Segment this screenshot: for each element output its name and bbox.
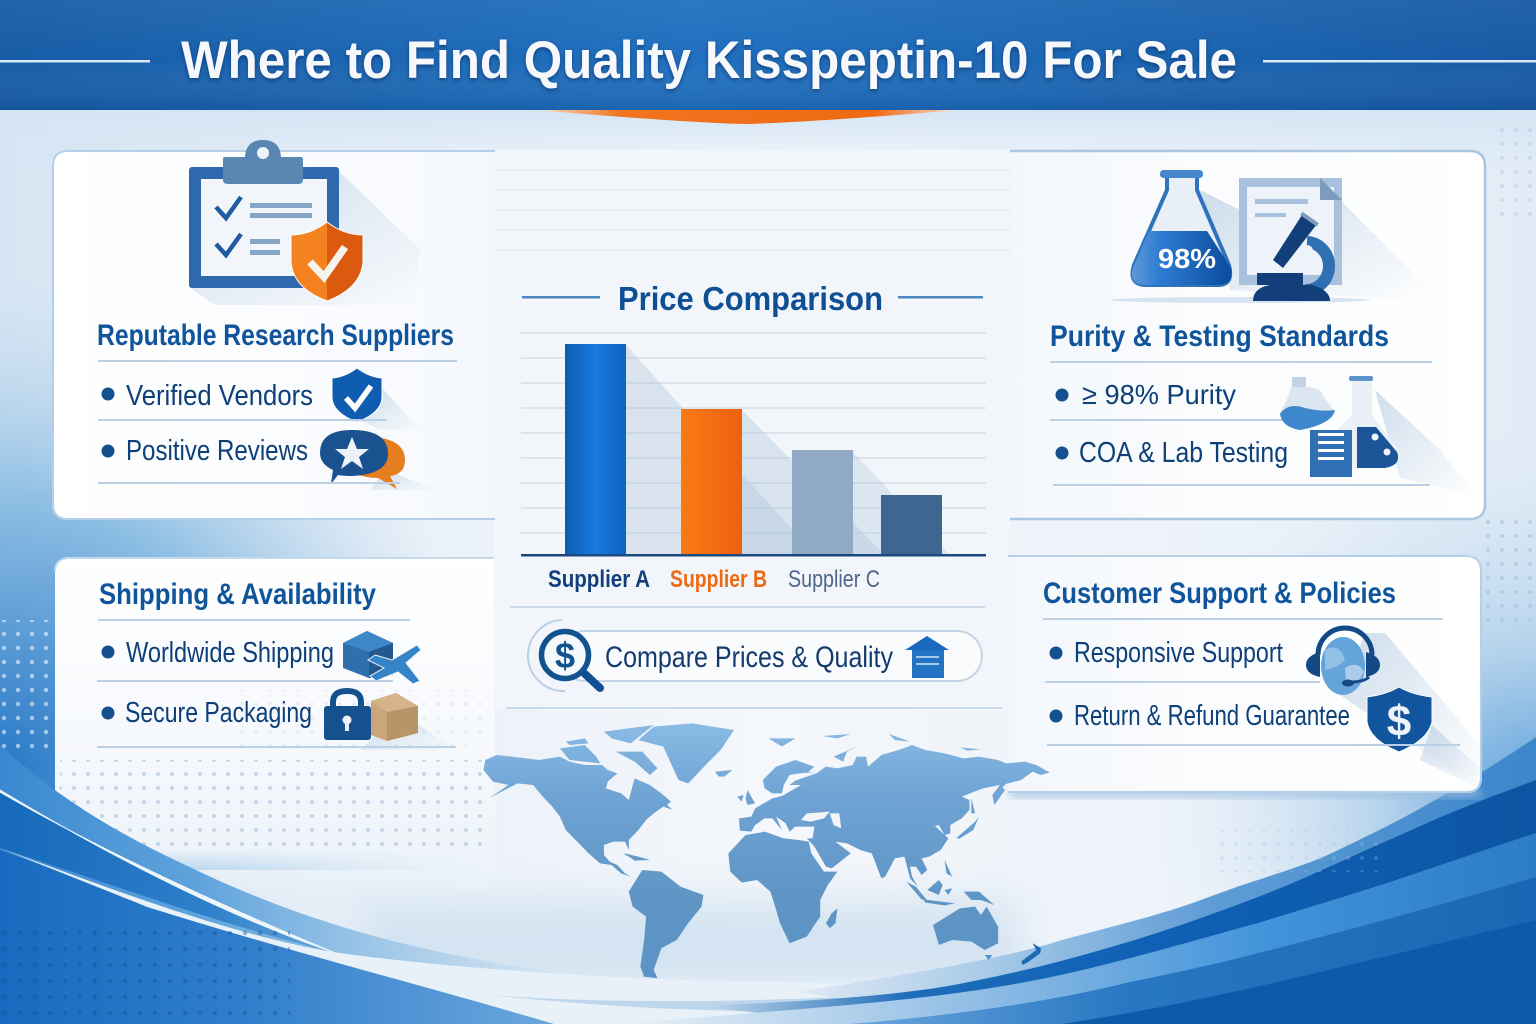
heading: reputable research suppliers: Reputable Research Suppliers xyxy=(97,319,454,352)
background lower tint xyxy=(360,900,1020,990)
item: worldwide shipping: Worldwide Shipping xyxy=(126,637,334,669)
bar: supplier C xyxy=(792,450,853,555)
orange accent under header xyxy=(535,110,960,124)
icon: headset globe xyxy=(1306,628,1480,790)
icon: clipboard with shield xyxy=(189,140,420,305)
icon: flask, document and microscope xyxy=(1110,170,1430,303)
label: supplier B: Supplier B xyxy=(670,566,767,593)
panel: shipping and availability xyxy=(55,557,495,900)
panel: reputable research suppliers xyxy=(52,140,495,520)
icon: box and plane xyxy=(343,631,421,684)
item: positive reviews: Positive Reviews xyxy=(126,435,308,467)
title rule left xyxy=(0,60,150,62)
icon: padlock and parcel xyxy=(324,691,456,750)
icon: flasks and lab report xyxy=(1280,376,1475,495)
bar: supplier A xyxy=(565,344,626,555)
bottom waves xyxy=(0,737,1536,1024)
world map xyxy=(483,723,1050,978)
heading: purity and testing standards: Purity & Testing Standards xyxy=(1050,320,1389,353)
title: Where to Find Quality Kisspeptin-10 For Sale xyxy=(181,31,1237,90)
icon: dollar magnifier: $ xyxy=(555,635,575,676)
bar: unlabelled fourth supplier xyxy=(881,495,942,555)
icon: flask, document and microscope: 98% xyxy=(1158,243,1216,274)
icon: blue shield check xyxy=(332,368,420,430)
panel: customer support and policies xyxy=(1008,555,1482,793)
background dot pattern left xyxy=(0,620,54,750)
background top fade xyxy=(0,110,1536,170)
item: secure packaging: Secure Packaging xyxy=(125,697,312,729)
header band xyxy=(0,0,1536,110)
item: responsive support: Responsive Support xyxy=(1074,637,1283,669)
icon: warehouse xyxy=(905,636,949,678)
icon: review speech bubbles xyxy=(320,430,438,490)
bar: supplier B xyxy=(681,409,742,555)
background dot pattern upper right xyxy=(1490,120,1536,220)
label: supplier A: Supplier A xyxy=(548,566,650,593)
icon: dollar magnifier xyxy=(542,632,600,688)
panel: purity and testing standards xyxy=(1010,150,1486,520)
background dot pattern right xyxy=(1486,520,1536,630)
item: verified vendors: Verified Vendors xyxy=(126,380,313,412)
item: purity percentage: ≥ 98% Purity xyxy=(1082,379,1236,410)
heading: customer support and policies: Customer Support & Policies xyxy=(1043,577,1396,610)
compare prices pill: Compare Prices & Quality xyxy=(605,641,893,674)
compare prices pill xyxy=(528,620,982,691)
icon: dollar shield xyxy=(1367,687,1482,790)
item: COA and lab testing: COA & Lab Testing xyxy=(1079,437,1288,469)
item: return and refund guarantee: Return & Refund Guarantee xyxy=(1074,700,1350,732)
label: supplier C: Supplier C xyxy=(788,566,880,593)
heading: shipping and availability: Shipping & Availability xyxy=(99,578,376,611)
price comparison section xyxy=(506,280,1002,708)
icon: dollar shield: $ xyxy=(1387,697,1411,746)
title rule right xyxy=(1263,60,1536,62)
panel: centre column xyxy=(494,150,1010,710)
background right glow xyxy=(1156,420,1536,900)
panel shadow: customer support xyxy=(1010,788,1480,798)
bar chart xyxy=(521,333,986,556)
heading: price comparison: Price Comparison xyxy=(618,280,883,317)
background left glow xyxy=(0,110,495,870)
